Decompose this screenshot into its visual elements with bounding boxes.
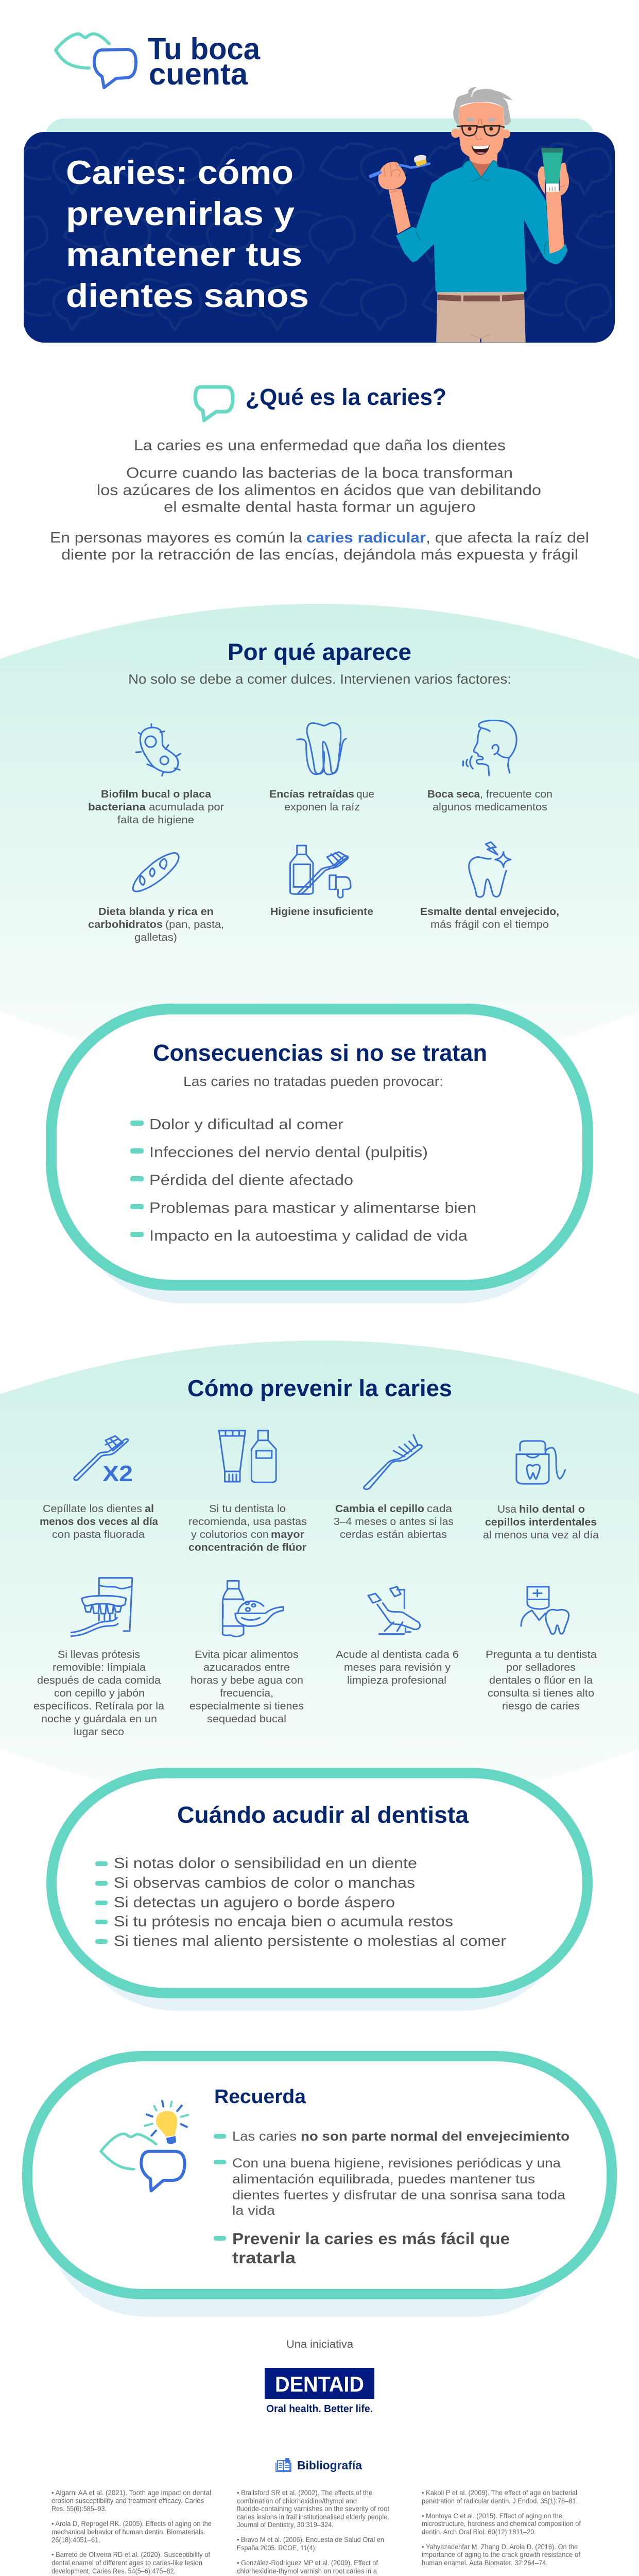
caption: biofilm: acumulada por	[149, 801, 224, 813]
logo wordmark	[148, 32, 261, 91]
intro text: La caries es una enfermedad que daña los dientes	[134, 437, 506, 454]
caption: cepíllate: Cepíllate los dientes	[43, 1503, 142, 1515]
caption: acude al dentista: meses para revisión y	[344, 1662, 451, 1673]
caption: prótesis: noche y guárdala en un	[41, 1713, 157, 1725]
bullet list	[130, 1116, 476, 1244]
caption: prótesis: removible: límpiala	[53, 1662, 146, 1673]
references: column 2: fluoride-containing varnishes on the severity of root	[237, 2505, 389, 2513]
caption: encías: exponen la raíz	[284, 801, 360, 813]
caption: cambia el cepillo: cerdas están abiertas	[340, 1529, 447, 1540]
intro text: los azúcares de los alimentos en ácidos que van debilitando	[97, 482, 541, 499]
intro text: caries radicular	[306, 530, 426, 546]
caption: cepíllate: menos dos veces al día	[40, 1516, 159, 1528]
intro text: En personas mayores es común la	[50, 530, 302, 546]
references: column 2: chlorhexidine-thymol varnish on root caries in a	[237, 2567, 377, 2575]
icon: mouthwash, toothbrush and thumb down	[290, 845, 351, 897]
caption: dieta: galletas)	[134, 931, 177, 943]
caption: hilo dental: Usa	[497, 1503, 517, 1515]
hero title: Caries: cómo	[66, 154, 293, 191]
bullet list: Problemas para masticar y alimentarse bien	[149, 1200, 476, 1216]
caption: boca seca: algunos medicamentos	[433, 801, 547, 813]
references: column 3: human enamel. Acta Biomater. 32:264–74.	[422, 2559, 548, 2567]
reminder list: la vida	[232, 2204, 275, 2218]
caption: pregunta a tu dentista: por selladores	[506, 1662, 576, 1673]
caption: prótesis: Si llevas prótesis	[58, 1649, 140, 1660]
caption: pregunta a tu dentista: dentales o flúor en la	[489, 1674, 593, 1686]
intro text: , que afecta la raíz del	[426, 530, 589, 546]
caption: dieta: carbohidratos	[88, 919, 163, 930]
caption: pastas y colutorios	[188, 1503, 307, 1553]
references: column 2: caries lesions in frail institutionalised elderly people.	[237, 2513, 389, 2521]
references: column 3	[422, 2489, 581, 2567]
logo wordmark: cuenta	[149, 57, 248, 91]
caption: prótesis: con cepillo y jabón	[54, 1687, 145, 1699]
caption: prótesis: lugar seco	[74, 1726, 124, 1738]
caption: evita picar: azucarados entre	[203, 1662, 290, 1673]
hero title: mantener tus	[66, 235, 302, 273]
panel: cómo prevenir la caries	[0, 1341, 639, 1809]
icon: denture and glass	[71, 1578, 132, 1636]
caption: boca seca: Boca seca	[427, 788, 480, 800]
caption: pastas y colutorios: recomienda, usa pastas	[188, 1516, 307, 1528]
references: column 1: • Algarni AA et al. (2021). Tooth age impact on dental	[51, 2489, 211, 2497]
caption: prótesis: después de cada comida	[37, 1674, 161, 1686]
references: column 3: microstructure, hardness and chemical composition of	[422, 2520, 581, 2528]
caption: biofilm: bacteriana	[88, 801, 146, 813]
caption: pastas y colutorios: y colutorios con	[191, 1529, 269, 1540]
references: column 1: dental enamel of different ages to caries-like lesion	[51, 2559, 202, 2567]
caption: acude al dentista: Acude al dentista cada 6	[336, 1649, 459, 1660]
caption: boca seca: , frecuente con	[480, 788, 552, 800]
reminder list: dientes fuertes y disfrutar de una sonrisa sana toda	[232, 2188, 565, 2202]
footer: una iniciativa: Una iniciativa	[286, 2338, 353, 2350]
bullet list: Infecciones del nervio dental (pulpitis)	[149, 1144, 428, 1161]
icon: bread	[133, 853, 179, 891]
icon: soda bottle and sweets	[222, 1581, 283, 1636]
bullet list	[95, 1855, 507, 1950]
icon: toothbrush x2	[74, 1436, 133, 1486]
caption: hilo dental: cepillos interdentales	[485, 1516, 597, 1528]
caption: cambia el cepillo: cada	[427, 1503, 453, 1515]
icon: dental floss	[516, 1441, 565, 1484]
heading: Consecuencias si no se tratan	[153, 1040, 487, 1066]
reminder list	[214, 2129, 569, 2267]
caption: cambia el cepillo: Cambia el cepillo	[335, 1503, 424, 1515]
references: column 3: importance of aging to the crack growth resistance of	[422, 2551, 580, 2558]
icon: dentist and tooth	[521, 1587, 569, 1634]
caption: pastas y colutorios: mayor	[271, 1529, 304, 1540]
references: column 2: • Bravo M et al. (2006). Encuesta de Salud Oral en	[237, 2536, 384, 2544]
icon: worn toothbrush	[364, 1435, 422, 1489]
panel: consecuencias si no se tratan	[51, 1009, 588, 1303]
icon: open book	[276, 2459, 291, 2472]
icon: speech bubble	[195, 387, 233, 420]
caption: dieta: (pan, pasta,	[165, 919, 224, 930]
references: column 2: • González-Rodríguez MP et al. (2009). Effect of	[237, 2559, 378, 2567]
references: column 1	[51, 2489, 212, 2575]
icon: aged tooth with lightning	[469, 842, 511, 897]
caption: dieta	[88, 906, 224, 943]
logo: Tu boca cuenta	[56, 32, 261, 91]
caption: prótesis	[33, 1649, 165, 1738]
caption: pastas y colutorios: concentración de flúor	[188, 1541, 306, 1553]
caption: esmalte: Esmalte dental envejecido,	[420, 906, 559, 918]
caption: esmalte: más frágil con el tiempo	[430, 919, 549, 930]
logo: Dentaid	[265, 2368, 374, 2415]
caption: hilo dental	[483, 1503, 599, 1541]
references: column 2: combination of chlorhexidine/thymol and	[237, 2497, 357, 2505]
caption: pregunta a tu dentista: Pregunta a tu dentista	[486, 1649, 597, 1660]
caption: hilo dental: al menos una vez al día	[483, 1529, 599, 1541]
illustration: older man with toothbrush and toothpaste	[371, 87, 569, 343]
reminder list: Con una buena higiene, revisiones periódicas y una	[232, 2156, 561, 2171]
references: column 1: Res. 55(6):585–93.	[51, 2505, 107, 2513]
heading: ¿Qué es la caries?	[246, 384, 446, 410]
subtitle: No solo se debe a comer dulces. Intervienen varios factores:	[128, 672, 511, 687]
caption: evita picar	[189, 1649, 304, 1725]
caption: biofilm	[88, 788, 224, 826]
references: column 3: • Montoya C et al. (2015). Effect of aging on the	[422, 2512, 562, 2520]
heading: Por qué aparece	[228, 639, 411, 665]
icon: tooth with receding gums	[297, 723, 346, 774]
bullet list: Si tu prótesis no encaja bien o acumula restos	[114, 1913, 453, 1930]
caption: biofilm: falta de higiene	[117, 814, 194, 826]
heading: bibliografía: Bibliografía	[297, 2459, 362, 2472]
references: column 2: • Brailsford SR et al. (2002). The effects of the	[237, 2489, 372, 2497]
logo: Dentaid: Oral health. Better life.	[266, 2403, 373, 2415]
panel: cuándo acudir al dentista	[51, 1773, 588, 2011]
bullet list: Impacto en la autoestima y calidad de vida	[149, 1228, 468, 1244]
caption: evita picar: sequedad bucal	[207, 1713, 286, 1725]
bullet list: Pérdida del diente afectado	[149, 1172, 353, 1189]
icon: lips, speech bubble and light bulb	[101, 2101, 188, 2191]
caption: cepíllate	[40, 1503, 159, 1540]
caption: pregunta a tu dentista: riesgo de caries	[502, 1700, 580, 1712]
panel: recuerda	[27, 2056, 612, 2317]
icon: dental chair	[368, 1587, 420, 1634]
bullet list: Si notas dolor o sensibilidad en un diente	[114, 1855, 417, 1872]
caption: cepíllate: con pasta fluorada	[52, 1529, 145, 1540]
caption: pregunta a tu dentista	[486, 1649, 597, 1712]
icon: toothpaste and mouthwash	[219, 1431, 276, 1482]
reminder list: tratarla	[232, 2248, 296, 2267]
references: column 3: • Yahyazadehfar M, Zhang D, Arola D. (2016). On the	[422, 2543, 578, 2551]
intro text	[50, 437, 589, 563]
caption: hilo dental: hilo dental o	[519, 1503, 585, 1515]
caption: higiene: Higiene insuficiente	[270, 906, 373, 918]
references: column 2: España 2005. RCOE, 11(4).	[237, 2544, 317, 2552]
intro text: el esmalte dental hasta formar un agujero	[164, 499, 476, 515]
references: column 3: • Kakoli P et al. (2009). The effect of age on bacterial	[422, 2489, 577, 2497]
references: column 3: penetration of radicular dentin. J Endod. 35(1):78–81.	[422, 2497, 578, 2505]
caption: cambia el cepillo	[334, 1503, 454, 1540]
references: column 1: • Arola D, Reprogel RK. (2005). Effects of aging on the	[51, 2520, 212, 2528]
heading: Cuándo acudir al dentista	[177, 1802, 469, 1828]
bullet list: Si tienes mal aliento persistente o molestias al comer	[114, 1933, 507, 1950]
caption: esmalte	[420, 906, 559, 930]
panel: hero banner	[24, 87, 615, 343]
references: column 3: dentin. Arch Oral Biol. 60(12):1811–20.	[422, 2528, 536, 2536]
references: column 1: development. Caries Res. 54(5–6):475–82.	[51, 2567, 176, 2575]
intro text: Ocurre cuando las bacterias de la boca transforman	[126, 465, 513, 481]
caption: evita picar: frecuencia,	[220, 1687, 273, 1699]
icon: head with dry mouth	[463, 720, 516, 775]
caption: pregunta a tu dentista: consulta si tienes alto	[488, 1687, 594, 1699]
caption: encías	[269, 788, 374, 813]
reminder list: alimentación equilibrada, puedes mantener tus	[232, 2172, 535, 2187]
references: column 1: 26(18):4051–61.	[51, 2536, 100, 2544]
caption: evita picar: horas y bebe agua con	[191, 1674, 303, 1686]
hero title	[66, 154, 309, 314]
references: column 2	[237, 2489, 393, 2576]
caption: evita picar: especialmente si tienes	[189, 1700, 304, 1712]
heading: Recuerda	[214, 2086, 306, 2108]
section: qué es la caries	[50, 384, 589, 563]
bullet list: Si observas cambios de color o manchas	[114, 1875, 415, 1891]
references: column 2: Journal of Dentistry, 30:319–324.	[237, 2521, 334, 2529]
references: column 1: mechanical behavior of human dentin. Biomaterials.	[51, 2528, 205, 2536]
hero title: prevenirlas y	[66, 195, 295, 232]
subtitle: Las caries no tratadas pueden provocar:	[183, 1075, 443, 1089]
intro text: diente por la retracción de las encías, dejándola más expuesta y frágil	[61, 547, 578, 563]
caption: biofilm: Biofilm bucal o placa	[101, 788, 212, 800]
references: column 1: • Barreto de Oliveira RD et al. (2020). Susceptibility of	[51, 2551, 210, 2558]
caption: acude al dentista	[336, 1649, 459, 1686]
caption: evita picar: Evita picar alimentos	[195, 1649, 299, 1660]
icon: toothbrush x2: X2	[102, 1461, 133, 1486]
icon: lips and speech bubble	[56, 34, 136, 88]
caption: boca seca	[427, 788, 552, 813]
caption: dieta: Dieta blanda y rica en	[98, 906, 214, 918]
caption: prótesis: específicos. Retírala por la	[33, 1700, 165, 1712]
heading: Cómo prevenir la caries	[187, 1375, 452, 1401]
caption: pastas y colutorios: Si tu dentista lo	[209, 1503, 286, 1515]
reminder list: Las caries	[232, 2129, 297, 2144]
caption: cambia el cepillo: 3–4 meses o antes si las	[334, 1516, 454, 1528]
reminder list: Prevenir la caries es más fácil que	[232, 2229, 510, 2248]
bullet list: Dolor y dificultad al comer	[149, 1116, 344, 1133]
caption: encías: Encías retraídas	[269, 788, 354, 800]
logo: Dentaid: DENTAID	[275, 2372, 364, 2396]
bullet list: Si detectas un agujero o borde áspero	[114, 1894, 395, 1911]
hero title: dientes sanos	[66, 277, 309, 314]
logo wordmark: Tu boca	[148, 32, 261, 66]
reminder list: no son parte normal del envejecimiento	[301, 2129, 569, 2144]
references: column 1: erosion susceptibility and treatment efficacy. Caries	[51, 2497, 204, 2505]
caption: acude al dentista: limpieza profesional	[347, 1674, 446, 1686]
panel: por qué aparece	[0, 604, 639, 1076]
caption: encías: que	[356, 788, 374, 800]
caption: cepíllate: al	[145, 1503, 154, 1515]
icon: bacteria	[136, 724, 181, 776]
